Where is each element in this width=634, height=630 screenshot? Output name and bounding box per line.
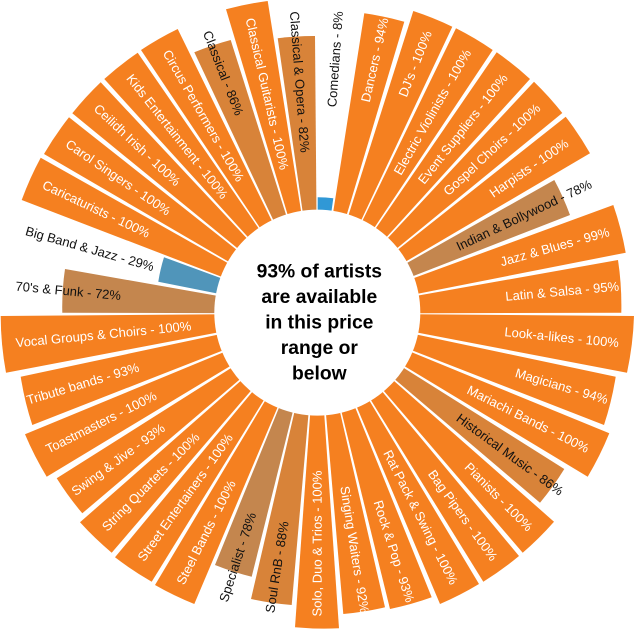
center text: 93% of artists (257, 261, 382, 384)
bar: Soul RnB 88%: Soul RnB - 88% (262, 520, 292, 614)
bar: Magicians 94%: Magicians - 94% (513, 365, 610, 407)
bar: Solo, Duo & Trios 100%: Solo, Duo & Trios - 100% (310, 470, 325, 617)
bar: Soul RnB 88% (251, 314, 317, 614)
bar: Big Band & Jazz 29%: Big Band & Jazz - 29% (24, 223, 156, 274)
bar: Dancers 94% (317, 13, 404, 314)
bar: DJ's 100% (317, 11, 452, 314)
bar: Bag Pipers 100% (317, 314, 519, 582)
bar: Tribute bands 93%: Tribute bands - 93% (25, 360, 141, 408)
bar: Swing & Jive 93% (57, 314, 317, 513)
center text: 93% of artists: are available (261, 287, 377, 308)
bar: Mariachi Bands 100%: Mariachi Bands - 100% (465, 382, 592, 456)
bar: Ceilidh Irish 100% (72, 82, 317, 314)
bar: Harpists 100%: Harpists - 100% (487, 135, 572, 200)
bar: Classical Guitarists 100%: Classical Guitarists - 100% (243, 16, 292, 172)
bar: Kids Entertainment 100% (104, 53, 317, 313)
center circle (214, 210, 420, 416)
bar: Latin & Salsa 95%: Latin & Salsa - 95% (505, 279, 620, 304)
bar: Vocal Groups & Choirs 100% (1, 314, 317, 373)
bar: Classical 86%: Classical - 86% (200, 29, 247, 118)
bar: Pianists 100% (317, 314, 554, 553)
bar: Rat Pack & Swing 100% (317, 314, 479, 604)
bar: Mariachi Bands 100% (317, 314, 609, 477)
bar: Specialist 78% (215, 314, 317, 604)
bar: Comedians 8%: Comedians - 8% (324, 10, 346, 108)
bar: Historical Music 86%: Historical Music - 86% (454, 410, 567, 499)
bar: Gospel Choirs 100%: Gospel Choirs - 100% (440, 100, 544, 199)
bar: Classical & Opera 82%: Classical & Opera - 82% (287, 11, 313, 154)
bar: Street Entertainers 100% (115, 314, 317, 582)
bar: Swing & Jive 93%: Swing & Jive - 93% (69, 420, 168, 499)
center text: 93% of artists: in this price (265, 312, 374, 333)
center text: 93% of artists: 93% of artists (257, 261, 382, 282)
bar: Gospel Choirs 100% (317, 82, 562, 314)
bar: Toastmasters 100% (25, 314, 317, 477)
bar: Comedians 8% (317, 10, 346, 313)
bar: Specialist 78%: Specialist - 78% (216, 510, 259, 604)
bar: Circus Performers 100%: Circus Performers - 100% (160, 47, 248, 185)
bar: Look-a-likes 100%: Look-a-likes - 100% (504, 324, 620, 350)
bar: Ceilidh Irish 100%: Ceilidh Irish - 100% (91, 101, 184, 189)
bar: Jazz & Blues 99% (317, 205, 626, 314)
bar: Toastmasters 100%: Toastmasters - 100% (43, 388, 159, 456)
bar: 70's & Funk 72%: 70's & Funk - 72% (15, 279, 122, 303)
bar: Magicians 94% (317, 314, 616, 425)
bar: Singing Waiters 92% (317, 314, 385, 614)
bar: DJ's 100%: DJ's - 100% (395, 28, 435, 99)
bar: Latin & Salsa 95% (317, 260, 621, 314)
bar: Jazz & Blues 99%: Jazz & Blues - 99% (498, 224, 611, 269)
bar: Event Suppliers 100% (317, 52, 530, 314)
bar: Steel Bands 100%: Steel Bands - 100% (173, 477, 239, 587)
bar: Rock & Pop 93% (317, 314, 432, 609)
center text: 93% of artists: below (292, 363, 348, 384)
bar: Indian & Bollywood 78%: Indian & Bollywood - 78% (454, 176, 595, 254)
bar: Big Band & Jazz 29% (24, 223, 317, 314)
bar: Indian & Bollywood 78% (317, 176, 595, 314)
bar: Solo, Duo & Trios 100% (295, 314, 339, 629)
bar: Singing Waiters 92%: Singing Waiters - 92% (337, 485, 372, 614)
bar: Classical & Opera 82% (278, 11, 317, 314)
bar: Street Entertainers 100%: Street Entertainers - 100% (134, 430, 236, 564)
bar: Electric Violinists 100% (317, 28, 493, 314)
bar: 70's & Funk 72% (15, 269, 317, 314)
bar: Rat Pack & Swing 100%: Rat Pack & Swing - 100% (380, 448, 461, 587)
bar: String Quartets 100% (80, 314, 317, 553)
bar: Steel Bands 100% (155, 314, 317, 604)
bar: Classical Guitarists 100% (226, 1, 317, 314)
bar: Rock & Pop 93%: Rock & Pop - 93% (371, 498, 418, 605)
bar: Electric Violinists 100%: Electric Violinists - 100% (391, 46, 474, 178)
bar: Carol Singers 100% (44, 117, 317, 314)
bar: Harpists 100% (317, 117, 590, 314)
bar: Historical Music 86% (317, 314, 567, 503)
bar: Event Suppliers 100%: Event Suppliers - 100% (415, 71, 511, 187)
bar: Kids Entertainment 100%: Kids Entertainment - 100% (123, 71, 231, 202)
bar: Dancers 94%: Dancers - 94% (358, 16, 392, 103)
bar: Look-a-likes 100% (317, 314, 634, 373)
bar: Pianists 100%: Pianists - 100% (462, 459, 536, 534)
bar: Bag Pipers 100%: Bag Pipers - 100% (425, 467, 501, 564)
bar: Carol Singers 100%: Carol Singers - 100% (63, 136, 174, 219)
bar: Caricaturists 100% (22, 158, 317, 314)
center text: 93% of artists: range or (281, 338, 358, 359)
bar: Classical 86% (194, 29, 317, 314)
bar: String Quartets 100%: String Quartets - 100% (99, 429, 203, 534)
bar: Vocal Groups & Choirs 100%: Vocal Groups & Choirs - 100% (15, 318, 192, 350)
bar: Circus Performers 100% (141, 29, 317, 314)
bar: Tribute bands 93% (21, 314, 317, 425)
bar: Caricaturists 100%: Caricaturists - 100% (40, 177, 153, 241)
